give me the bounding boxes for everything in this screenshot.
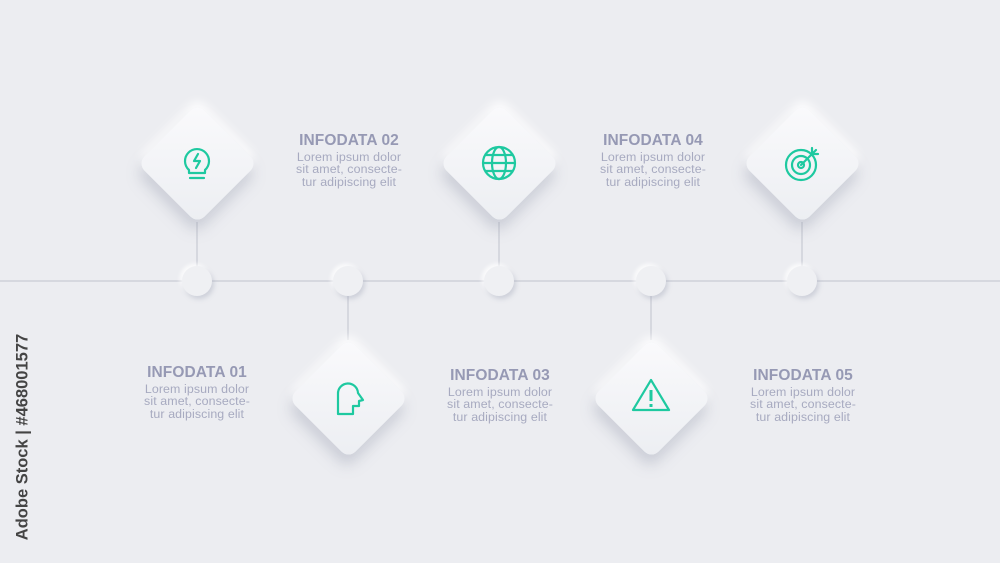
timeline line	[0, 280, 1000, 282]
text: infodata 05: tur adipiscing elit	[756, 410, 850, 424]
text: infodata 03: INFODATA 03	[450, 367, 550, 384]
icon: globe	[482, 146, 516, 180]
timeline dots	[178, 262, 820, 300]
diamond 5	[742, 103, 863, 224]
text: infodata 02: tur adipiscing elit	[302, 175, 396, 189]
text: infodata 01: Lorem ipsum dolor	[145, 382, 249, 396]
text: infodata 05	[750, 367, 856, 424]
icon: head	[336, 382, 364, 416]
icon: target	[784, 146, 820, 182]
text: infodata 03: sit amet, consecte-	[447, 397, 553, 411]
diamond 1	[137, 103, 258, 224]
text: infodata 01: tur adipiscing elit	[150, 407, 244, 421]
text: infodata 04: tur adipiscing elit	[606, 175, 700, 189]
text: infodata 02: sit amet, consecte-	[296, 162, 402, 176]
diamond 4	[591, 338, 712, 459]
text: infodata 04	[600, 132, 706, 189]
text: infodata 05: sit amet, consecte-	[750, 397, 856, 411]
text: infodata 01	[144, 364, 250, 421]
diamond 3	[439, 103, 560, 224]
text: infodata 04: Lorem ipsum dolor	[601, 150, 705, 164]
text: infodata 05: Lorem ipsum dolor	[751, 385, 855, 399]
text: infodata 04: sit amet, consecte-	[600, 162, 706, 176]
watermark id: Adobe Stock | #468001577	[14, 334, 32, 540]
text: infodata 01: sit amet, consecte-	[144, 394, 250, 408]
text: infodata 02: INFODATA 02	[299, 132, 399, 149]
icon: bulb	[184, 148, 210, 180]
text: infodata 02: Lorem ipsum dolor	[297, 150, 401, 164]
text: infodata 05: INFODATA 05	[753, 367, 853, 384]
text: infodata 04: INFODATA 04	[603, 132, 703, 149]
text: infodata 03: tur adipiscing elit	[453, 410, 547, 424]
diamond 2	[288, 338, 409, 459]
text: infodata 03	[447, 367, 553, 424]
text: infodata 02	[296, 132, 402, 189]
icon: warning	[632, 378, 670, 412]
text: infodata 03: Lorem ipsum dolor	[448, 385, 552, 399]
text: infodata 01: INFODATA 01	[147, 364, 247, 381]
